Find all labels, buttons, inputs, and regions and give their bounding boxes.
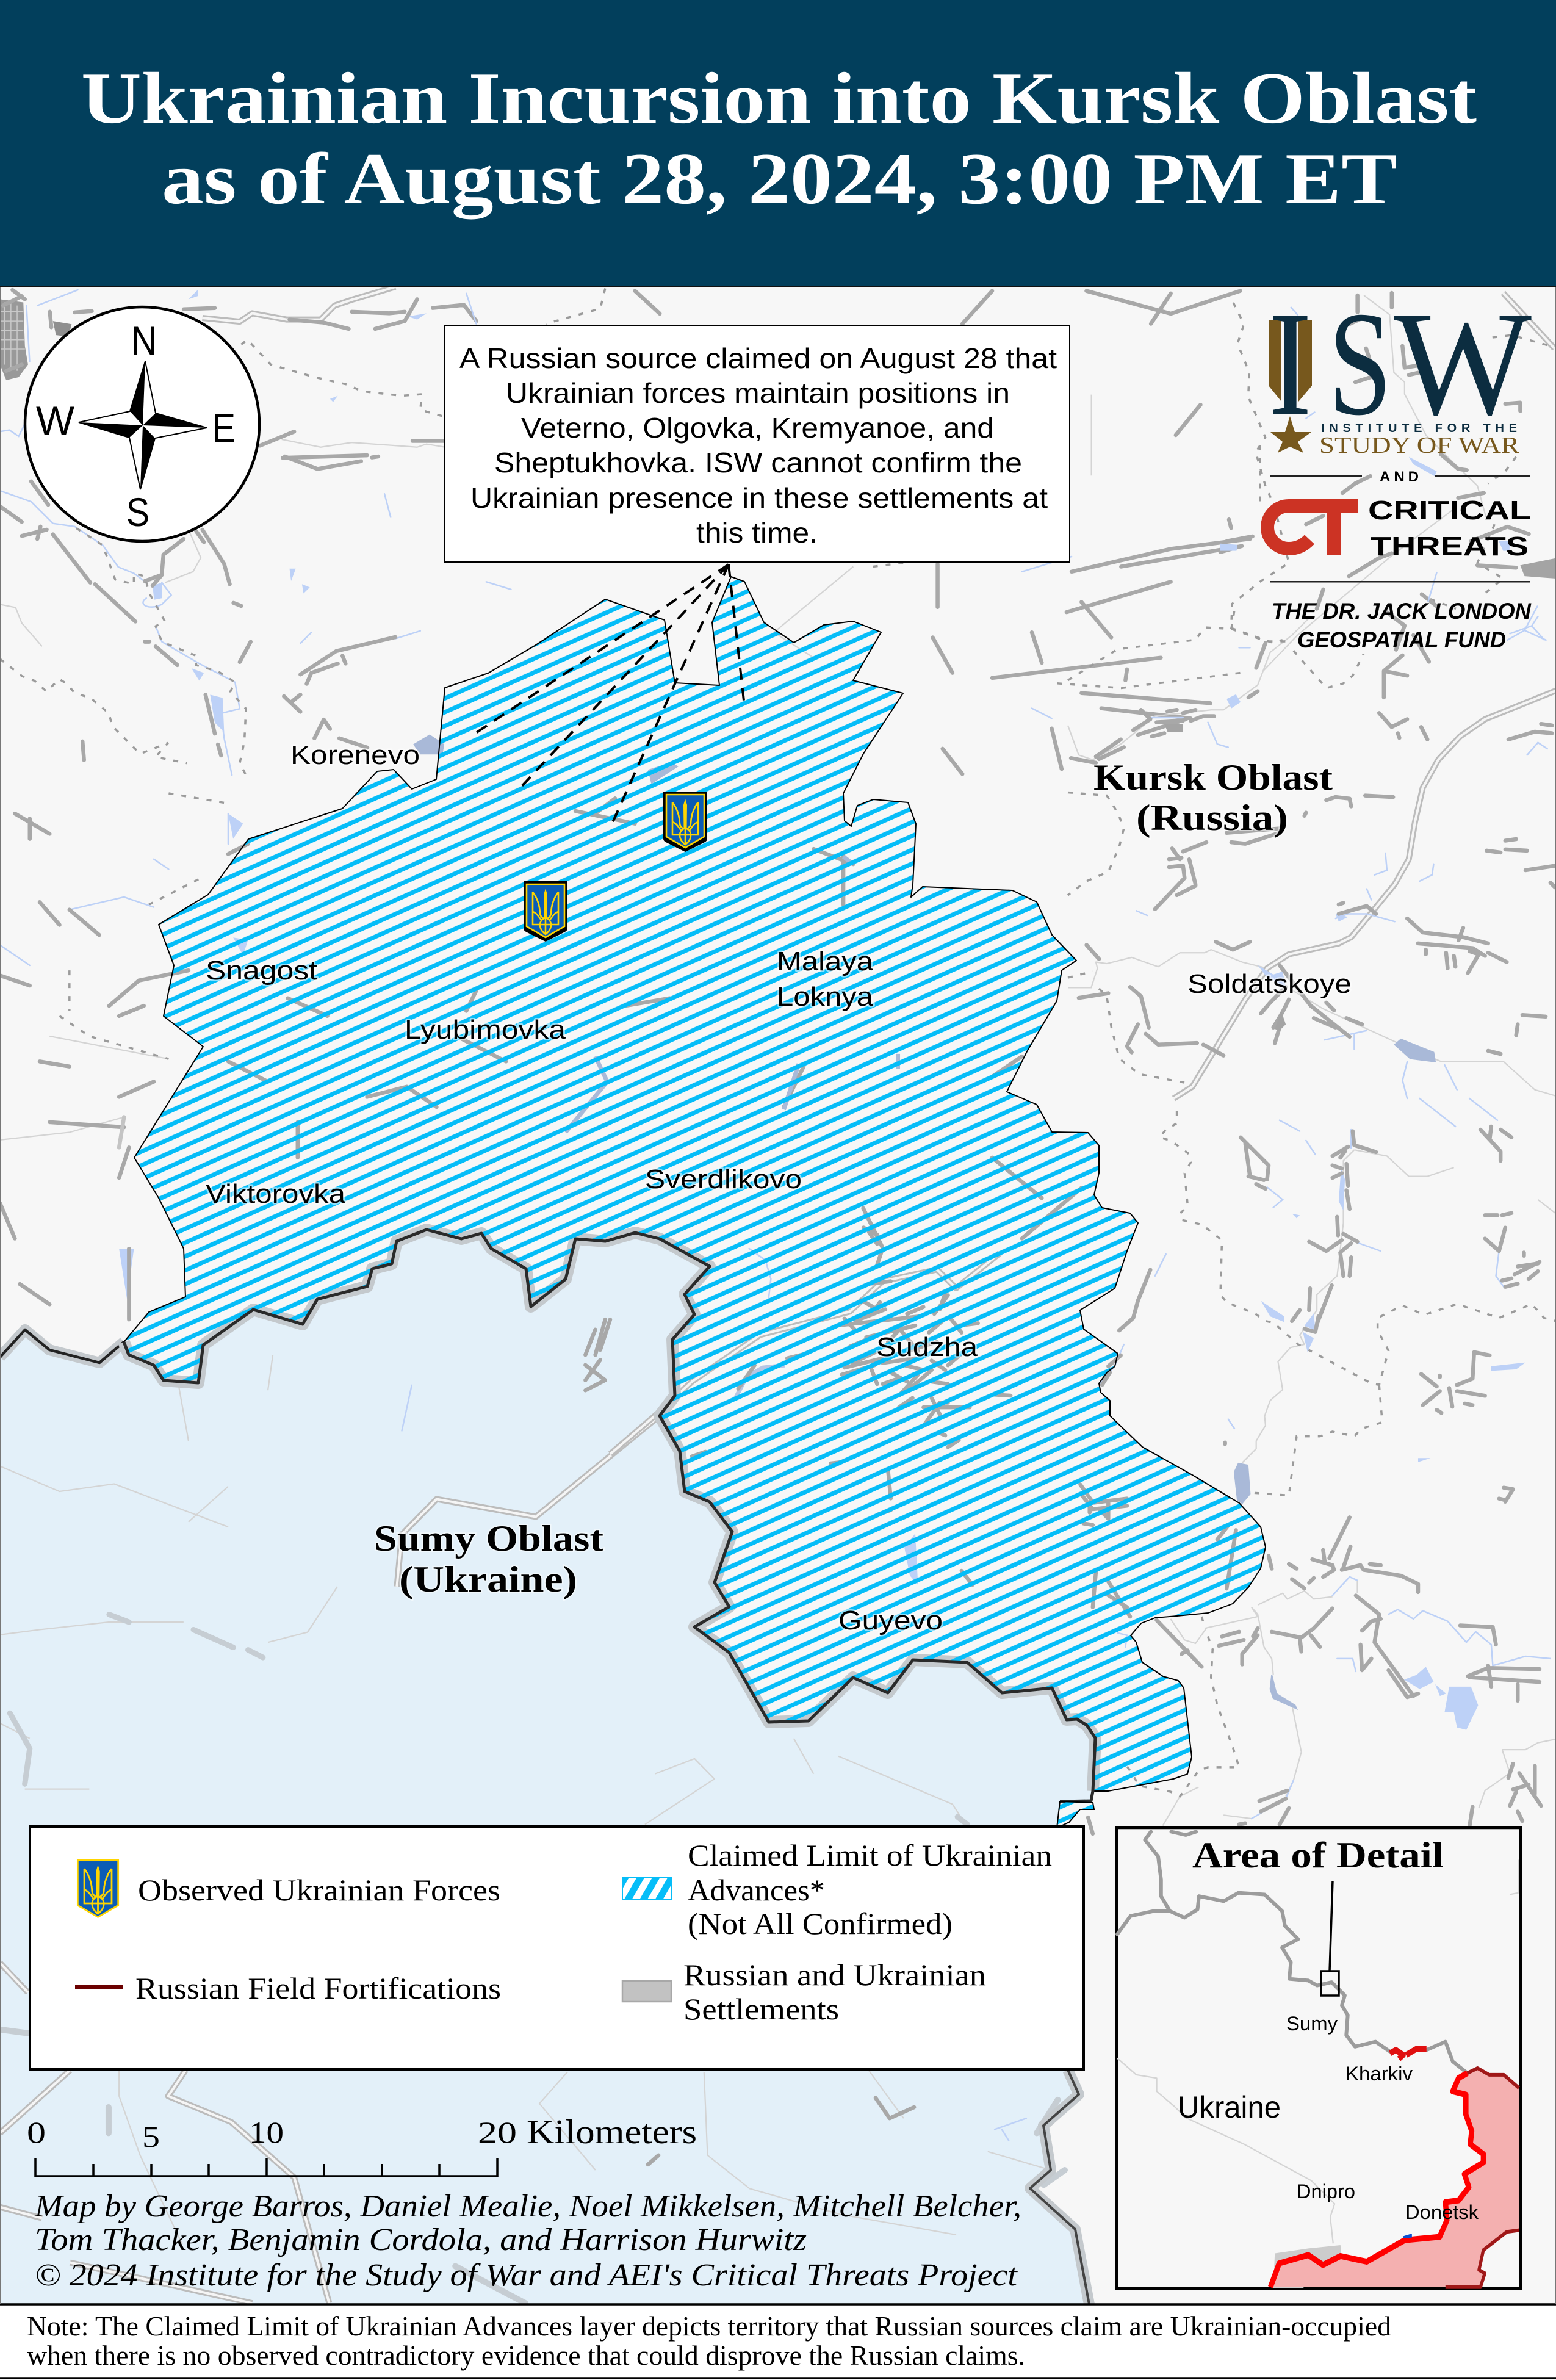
map features: east of Kursk, central band <box>1080 1098 1556 1525</box>
header rule <box>0 286 1556 287</box>
scale bar <box>27 2113 697 2176</box>
logo: Dr. Jack London Geospatial Fund: THE DR. JACK LONDON <box>1272 599 1532 624</box>
compass rose <box>25 307 259 541</box>
legend: claimed limit of Ukrainian advances: (Not All Confirmed) <box>688 1906 953 1941</box>
logo: Dr. Jack London Geospatial Fund: GEOSPATIAL FUND <box>1297 627 1506 652</box>
callout: Russian source claim: A Russian source claimed on August 28 that <box>459 342 1057 374</box>
logo: Critical Threats: THREATS <box>1371 532 1529 561</box>
claimed limit of Ukrainian advances: hatched area <box>124 577 1266 1828</box>
logo: Critical Threats: CRITICAL <box>1368 496 1531 525</box>
logo: Institute for the Study of War: I <box>1269 281 1312 446</box>
logo: Institute for the Study of War: S <box>1328 281 1392 446</box>
callout: Russian source claim: Sheptukhovka. ISW cannot confirm the <box>494 447 1022 478</box>
map credits: © 2024 Institute for the Study of War and AEI's Critical Threats Project <box>35 2258 1018 2293</box>
settlement labels: Sverdlikovo <box>645 1164 802 1194</box>
icon: Ukrainian forces trident 1 <box>663 792 707 852</box>
map feature: lake north of trident <box>649 763 677 783</box>
compass rose: E <box>212 405 236 450</box>
callout: Russian source claim: Ukrainian presence in these settlements at <box>470 482 1048 514</box>
footnote panel: Note: The Claimed Limit of Ukrainian Advances layer depicts territory that Russian sources claim are Ukrainian-occupied <box>27 2310 1391 2342</box>
logo: Institute for the Study of War: STUDY OF WAR <box>1319 433 1520 458</box>
legend: settlements <box>622 1958 986 2026</box>
oblast label: Sumy: Sumy Oblast <box>374 1518 603 1559</box>
logo: Critical Threats <box>1267 496 1531 561</box>
scale bar: 0 <box>27 2115 46 2149</box>
settlement labels: Sudzha <box>876 1332 978 1362</box>
legend: claimed limit of Ukrainian advances <box>622 1838 1052 1941</box>
map features: below legend <box>0 1963 1065 2303</box>
map features: Sudzha town <box>610 1227 1010 1585</box>
panel: area of detail inset: Sumy <box>1286 2013 1338 2035</box>
logo: Institute for the Study of War <box>1269 281 1532 458</box>
compass rose: W <box>36 398 75 443</box>
footnote panel <box>0 2304 1556 2378</box>
map features: behind logos <box>1220 293 1556 671</box>
western Ukraine-Russia border segment <box>0 1330 124 1363</box>
callout: Russian source claim: this time. <box>696 517 818 549</box>
panel: area of detail inset: Area of Detail <box>1192 1835 1444 1875</box>
panel: area of detail inset: Kharkiv <box>1345 2063 1413 2085</box>
legend: Russian field fortifications: Russian Field Fortifications <box>135 1971 501 2005</box>
logo: Dr. Jack London Geospatial Fund <box>1270 581 1532 652</box>
scale bar: Kilometers <box>527 2113 697 2151</box>
settlement labels: Loknya <box>777 982 874 1012</box>
oblast label: Kursk: (Russia) <box>1136 798 1288 838</box>
inset map <box>1117 1831 1519 2288</box>
scale bar: 20 <box>478 2115 517 2149</box>
legend: settlements: Russian and Ukrainian <box>683 1958 986 1992</box>
panel: area of detail inset: Dnipro <box>1297 2180 1355 2202</box>
scale bar: 10 <box>249 2115 284 2149</box>
settlement labels: Korenevo <box>290 740 420 770</box>
map features: Ukrainian interior, south <box>0 1587 967 1825</box>
settlement labels: Lyubimovka <box>405 1015 566 1045</box>
oblast label: Sumy <box>374 1518 603 1599</box>
legend: settlements: Settlements <box>683 1992 839 2026</box>
panel: legend <box>30 1826 1084 2069</box>
legend: claimed limit of Ukrainian advances: Claimed Limit of Ukrainian <box>688 1838 1052 1872</box>
title <box>81 57 1477 220</box>
settlement labels: Guyevo <box>838 1606 943 1635</box>
settlement labels: Snagost <box>206 956 317 986</box>
icon: Ukrainian forces trident 2 <box>524 881 567 942</box>
callout: Russian source claim <box>445 326 1070 562</box>
map features: west of incursion and Ukrainian interior <box>0 793 1081 1587</box>
compass rose: S <box>126 489 149 535</box>
settlement labels <box>206 740 1352 1635</box>
panel: area of detail inset: Donetsk <box>1405 2201 1479 2223</box>
Ukraine territory: Sumy Oblast <box>0 1230 1095 2304</box>
settlement labels: Soldatskoye <box>1187 969 1352 999</box>
oblast label: Kursk <box>1093 757 1333 838</box>
compass rose: N <box>131 318 157 363</box>
footnote panel: when there is no observed contradictory evidence that could disprove the Russian claims. <box>27 2340 1025 2371</box>
scale bar: 5 <box>142 2119 160 2154</box>
panel: area of detail inset <box>1117 1828 1521 2288</box>
settlement labels: Malaya <box>777 947 874 976</box>
map features: east of Kursk, Soldatskoye area <box>1068 610 1556 1098</box>
Ukrainian-Russian border east segment with settlement halo <box>1030 2070 1089 2304</box>
map features: southeast settlements and lakes <box>1082 1495 1556 1834</box>
callout: Russian source claim: Veterno, Olgovka, Kremyanoe, and <box>521 412 994 444</box>
logo: Institute for the Study of War: INSTITUTE FOR THE <box>1321 422 1517 435</box>
title: Ukrainian Incursion into Kursk Oblast <box>81 57 1477 139</box>
map credits: Tom Thacker, Benjamin Cordola, and Harrison Hurwitz <box>35 2223 807 2257</box>
legend: observed Ukrainian forces: Observed Ukrainian Forces <box>138 1873 500 1907</box>
header banner <box>0 0 1556 287</box>
legend: claimed limit of Ukrainian advances: Advances* <box>688 1873 825 1907</box>
title: as of August 28, 2024, 3:00 PM ET <box>162 138 1397 220</box>
map features: northwest settlements, rivers and boundaries <box>0 287 477 775</box>
map credits <box>34 2189 1021 2293</box>
callout leader lines <box>470 564 744 825</box>
oblast label: Kursk: Kursk Oblast <box>1093 757 1333 798</box>
oblast label: Sumy: (Ukraine) <box>399 1559 577 1599</box>
settlement labels: Viktorovka <box>206 1179 346 1209</box>
map features: north centre and logo background <box>283 289 1260 774</box>
logo divider: and: AND <box>1380 469 1419 485</box>
callout: Russian source claim: Ukrainian forces maintain positions in <box>506 377 1010 409</box>
panel: area of detail inset: Ukraine <box>1178 2090 1281 2124</box>
legend: observed Ukrainian forces <box>77 1860 500 1917</box>
logo: Institute for the Study of War: W <box>1394 281 1532 446</box>
map credits: Map by George Barros, Daniel Mealie, Noel Mikkelsen, Mitchell Belcher, <box>34 2189 1021 2224</box>
